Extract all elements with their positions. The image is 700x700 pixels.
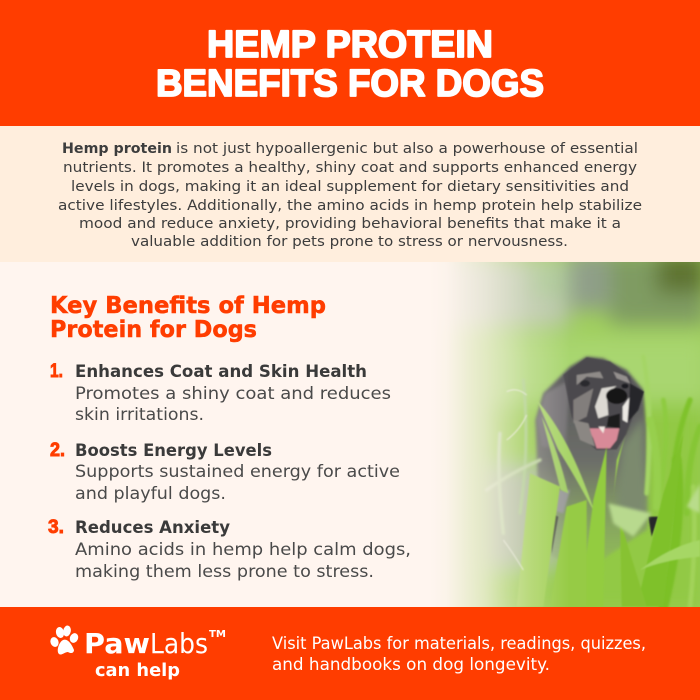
grass blades, back layer <box>487 357 700 607</box>
benefit 3: Reduces Anxiety <box>75 518 230 537</box>
benefit 3 <box>48 517 411 581</box>
icon: paw <box>49 625 80 655</box>
logo wordmark: Labs <box>150 627 208 660</box>
benefit 2: and playful dogs. <box>75 484 226 503</box>
panel: introduction: is not just hypoallergenic but also a powerhouse of essential <box>176 141 638 157</box>
panel: introduction: mood and reduce anxiety, providing behavioral benefits that make it a <box>79 216 621 232</box>
page background <box>0 262 700 607</box>
footer banner <box>0 607 700 700</box>
logo wordmark: TM <box>209 629 226 640</box>
benefit 3: making them less prone to stress. <box>75 562 374 581</box>
benefit 2 <box>50 440 400 503</box>
panel: introduction: nutrients. It promotes a healthy, shiny coat and supports enhanced energy <box>63 160 637 176</box>
blurred background <box>457 262 700 607</box>
logo wordmark: Paw <box>84 627 150 660</box>
call to action text <box>272 634 646 675</box>
panel: introduction: active lifestyles. Additionally, the amino acids in hemp protein help stabilize <box>58 198 642 214</box>
section heading: Protein for Dogs <box>50 317 257 343</box>
panel: introduction: valuable addition for pets prone to stress or nervousness. <box>131 234 568 250</box>
grass blades, front layer <box>517 400 700 607</box>
section heading <box>50 293 326 343</box>
photo: senior dog in tall green grass <box>449 262 700 607</box>
chest and legs <box>556 489 570 514</box>
section heading: Key Benefits of Hemp <box>50 293 326 319</box>
dog body <box>535 357 647 570</box>
title: HEMP PROTEIN <box>207 24 493 66</box>
title <box>156 24 544 105</box>
benefit 1: Promotes a shiny coat and reduces <box>75 384 391 403</box>
call to action text: Visit PawLabs for materials, readings, quizzes, <box>272 634 646 654</box>
benefit 3: 3. <box>48 517 64 538</box>
call to action text: and handbooks on dog longevity. <box>272 655 550 675</box>
benefit 2: Supports sustained energy for active <box>75 462 400 481</box>
benefit 1: Enhances Coat and Skin Health <box>75 362 367 381</box>
benefit 3: Amino acids in hemp help calm dogs, <box>75 540 411 559</box>
panel: introduction: levels in dogs, making it an ideal supplement for dietary sensitivities and <box>71 179 629 195</box>
benefit 2: 2. <box>50 440 65 461</box>
panel: introduction <box>0 126 700 262</box>
dog head <box>563 357 644 450</box>
left fade <box>430 262 570 607</box>
title banner <box>0 0 700 126</box>
benefit 2: Boosts Energy Levels <box>75 441 272 460</box>
benefit 1: 1. <box>50 361 63 382</box>
benefit 1 <box>50 361 391 424</box>
panel: introduction: Hemp protein <box>62 141 172 157</box>
logo wordmark <box>84 627 226 681</box>
logo wordmark: can help <box>95 660 180 681</box>
title: BENEFITS FOR DOGS <box>156 63 544 105</box>
benefit 1: skin irritations. <box>75 405 204 424</box>
